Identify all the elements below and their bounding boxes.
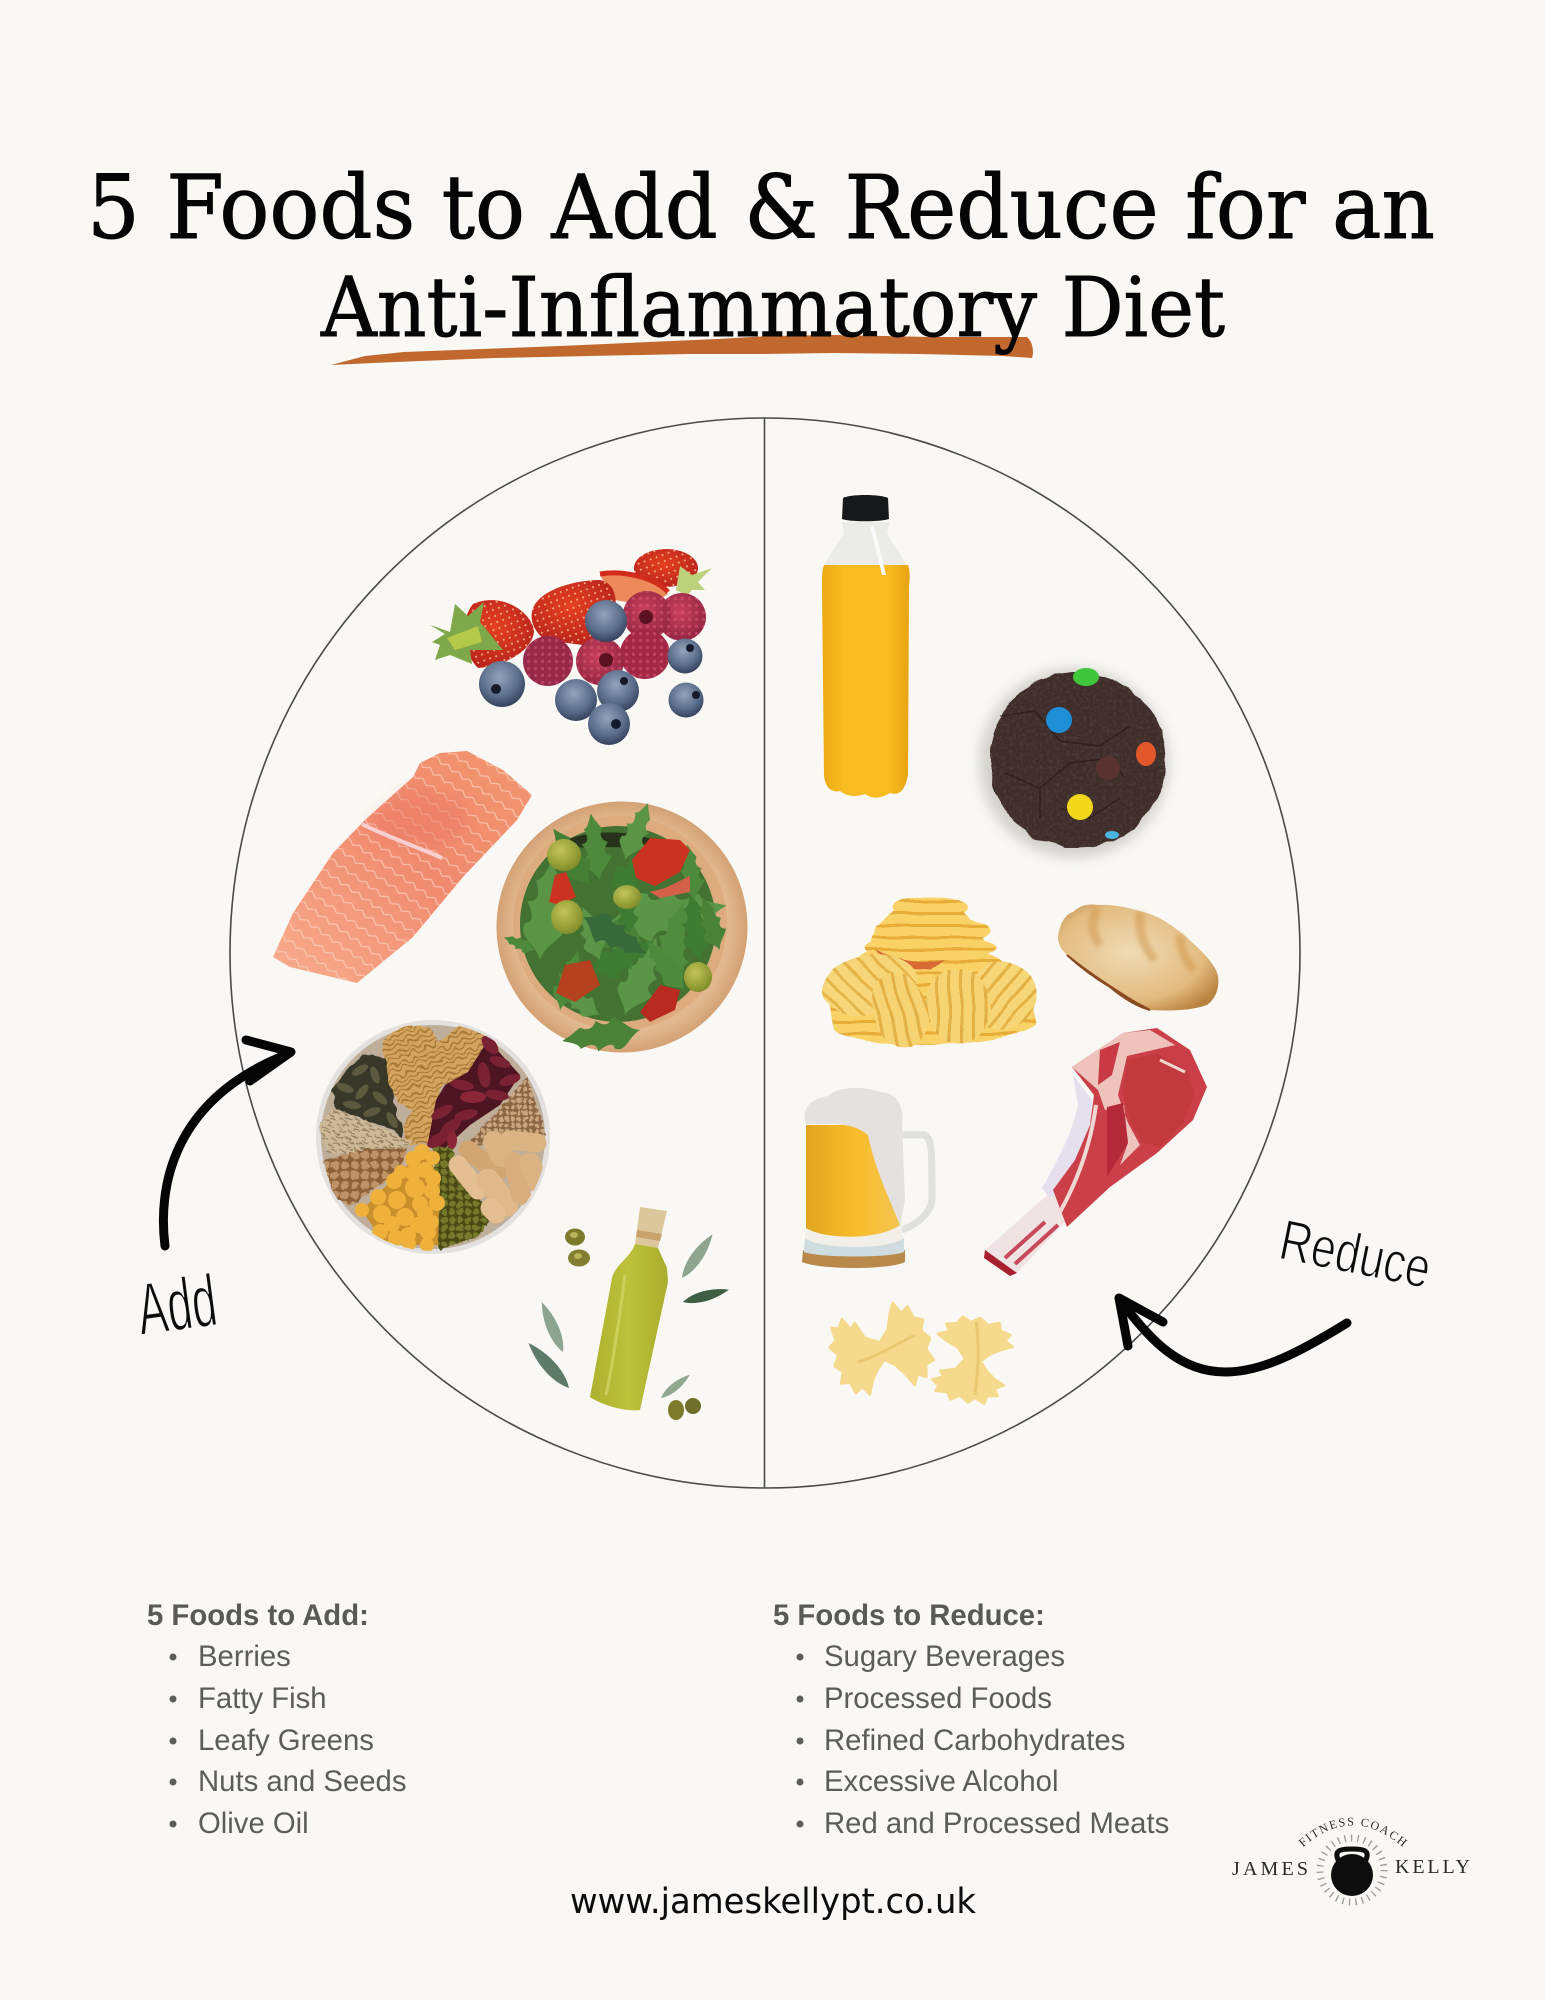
list: foods to add: Leafy Greens — [198, 1724, 374, 1757]
food: tomahawk steak — [984, 1028, 1207, 1276]
lentils — [324, 1148, 408, 1206]
olives — [565, 1228, 701, 1420]
arugula leaves — [501, 798, 732, 1059]
list: foods to reduce: 5 Foods to Reduce: — [773, 1599, 1045, 1632]
list: foods to add: Berries — [198, 1640, 291, 1673]
foam — [805, 1088, 905, 1225]
food: crisps pile — [818, 897, 1037, 1054]
peanuts — [458, 1140, 538, 1214]
rib membrane — [1042, 1075, 1092, 1198]
food: chocolate cookie — [979, 668, 1169, 858]
title second line: Anti-Inflammatory Diet — [320, 261, 1225, 356]
list: foods to add: Nuts and Seeds — [198, 1765, 406, 1798]
kettlebell — [1331, 1849, 1373, 1896]
title: 5 Foods to Add & Reduce for an — [87, 156, 1435, 259]
pumpkin seeds — [331, 1054, 405, 1138]
title — [87, 156, 1435, 356]
juice — [822, 565, 910, 798]
olives — [547, 839, 712, 992]
list: foods to reduce: Sugary Beverages — [824, 1640, 1065, 1673]
food: beer mug — [802, 1088, 932, 1268]
food: salmon fillet — [273, 751, 532, 983]
logo: James Kelly fitness coach: KELLY — [1395, 1856, 1470, 1878]
logo: James Kelly fitness coach: JAMES — [1232, 1858, 1308, 1880]
plate circle divided into add and reduce halves — [230, 418, 1300, 1488]
list: foods to reduce: Processed Foods — [824, 1682, 1052, 1715]
food: nuts and seeds plate — [316, 1020, 550, 1254]
sunburst rays — [1320, 1838, 1384, 1902]
strawberries — [430, 549, 712, 668]
list: foods to add: Fatty Fish — [198, 1682, 327, 1715]
list: foods to reduce — [773, 1599, 1169, 1840]
bottle body — [590, 1244, 668, 1410]
logo: James Kelly fitness coach: FITNESS COACH — [1298, 1818, 1408, 1847]
handle — [902, 1135, 932, 1230]
food: salad bowl — [496, 798, 748, 1059]
list: foods to add: 5 Foods to Add: — [147, 1599, 369, 1632]
food: olive oil bottle with leaves — [524, 1207, 730, 1420]
food: berries — [430, 549, 712, 745]
chickpeas — [355, 1144, 445, 1252]
mung beans — [430, 1146, 494, 1250]
raspberries — [523, 591, 706, 686]
tomatoes — [549, 838, 690, 1022]
food: farfalle pasta — [823, 1296, 1017, 1408]
label: add: Add — [132, 1259, 221, 1351]
website url: www.jameskellypt.co.uk — [570, 1882, 977, 1922]
oats — [318, 1108, 412, 1154]
list: foods to add: Olive Oil — [198, 1807, 309, 1840]
meat — [1053, 1028, 1207, 1227]
glass body — [802, 1125, 905, 1268]
walnuts — [383, 1022, 485, 1146]
food: bread roll — [1058, 905, 1218, 1010]
brush underline — [331, 335, 1033, 365]
blueberries — [479, 600, 704, 745]
arrow: add — [163, 1040, 291, 1246]
empty clear plastic — [822, 522, 909, 572]
cap — [842, 495, 889, 521]
candy — [1046, 668, 1156, 839]
list: foods to add — [147, 1599, 406, 1840]
list: foods to reduce: Red and Processed Meats — [824, 1807, 1169, 1840]
olive leaves — [524, 1231, 730, 1401]
list: foods to reduce: Refined Carbohydrates — [824, 1724, 1125, 1757]
logo: James Kelly fitness coach — [1232, 1818, 1470, 1906]
bottle cap — [635, 1207, 667, 1248]
bone — [985, 1190, 1067, 1273]
list: foods to reduce: Excessive Alcohol — [824, 1765, 1058, 1798]
label: reduce: Reduce — [1275, 1208, 1437, 1300]
buckwheat — [470, 1076, 546, 1146]
arrow: reduce — [1119, 1298, 1347, 1372]
kidney beans — [425, 1033, 522, 1151]
food: sugary drink bottle — [822, 495, 910, 798]
